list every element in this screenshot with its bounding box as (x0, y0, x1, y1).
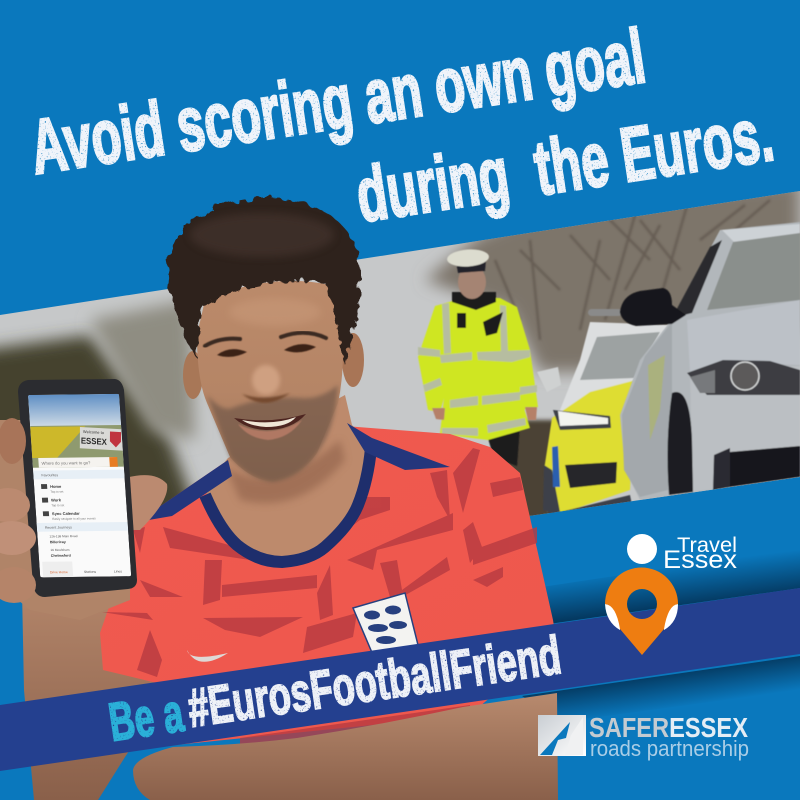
collar (205, 448, 371, 562)
crossed arm (133, 693, 558, 800)
roads partnership: roads partnership (590, 736, 749, 761)
work sub: Tap to set (51, 503, 65, 507)
favourites label: Favourites (41, 473, 59, 477)
windscreen (580, 332, 660, 380)
right eye (284, 344, 316, 352)
title: Avoid scoring an own goal during the Euros (25, 13, 779, 239)
sign text: Welcome to (83, 429, 105, 435)
hi-vis coat (418, 298, 538, 440)
sky (0, 191, 800, 516)
trees right (425, 180, 800, 372)
tab label lines: Lines (114, 570, 122, 574)
police car (537, 309, 670, 515)
favourites header (33, 470, 125, 479)
logo square (538, 715, 586, 756)
lower lip (238, 420, 302, 440)
mirror (537, 367, 561, 392)
logo: Safer Essex roads partnership (538, 712, 749, 761)
screen background (28, 394, 131, 577)
hood (687, 300, 800, 372)
swoosh (187, 650, 228, 662)
reflective strips (418, 303, 537, 436)
forearm below phone (22, 560, 170, 800)
nose base shadow (242, 393, 290, 403)
sign crest (110, 432, 121, 448)
face (197, 281, 343, 482)
field (30, 425, 124, 468)
grille (730, 446, 800, 487)
windscreen (707, 233, 800, 310)
front bumper (690, 366, 800, 492)
hair highlight (190, 213, 334, 257)
sign board (80, 427, 124, 451)
hat band (456, 260, 486, 273)
finger two (0, 488, 30, 522)
photo band: roadside scene (0, 191, 800, 516)
logo: Travel Essex (605, 534, 738, 655)
tab label drive: Drive Home (50, 570, 68, 574)
collar and body camera (452, 292, 503, 336)
orange pin (605, 568, 678, 655)
search text: Where do you want to go? (41, 460, 91, 466)
phone (18, 379, 137, 597)
road mark (540, 722, 570, 755)
neck (205, 395, 372, 562)
trousers (488, 431, 520, 466)
palm behind phone (0, 420, 130, 620)
door reflection (622, 322, 672, 497)
presenter: man in England shirt (22, 198, 556, 800)
hands (432, 407, 537, 420)
Essex sign (80, 427, 124, 451)
trees left pale (90, 300, 195, 440)
left eye (217, 349, 247, 357)
hashtag: #EurosFootballFriend (184, 625, 565, 739)
tree trunks (495, 195, 770, 340)
fingers on phone edge (0, 418, 36, 603)
road mark right (565, 717, 583, 755)
sky photo (28, 394, 121, 427)
finger four (0, 567, 36, 603)
door and body side (620, 222, 800, 500)
SAFER ESSEX wordmark: SAFERESSEX (589, 712, 748, 743)
hand holding phone (0, 420, 167, 620)
Be a: Be a (105, 683, 188, 753)
hedge behind car (505, 420, 555, 520)
wing mirror (620, 288, 686, 326)
nose highlight (252, 365, 280, 395)
crest (353, 593, 418, 655)
shoulder trim (137, 423, 450, 522)
ear right (342, 333, 364, 387)
calendar row: Sync Calendar (52, 511, 80, 516)
work row: Work (51, 497, 62, 502)
spoiler (588, 309, 622, 316)
eyebrows (205, 333, 326, 346)
journey two place: Chelmsford (51, 554, 71, 558)
banner text: Be a #EurosFootballFriend (105, 625, 565, 753)
neck shadow (225, 440, 345, 503)
journey two: 16 Moulsham (50, 548, 70, 552)
blue stripe (552, 446, 560, 487)
tab drive home (42, 561, 73, 577)
trees left (0, 324, 199, 506)
sign ESSEX: ESSEX (81, 436, 107, 447)
shirt (100, 426, 556, 745)
shirt pattern (102, 448, 537, 748)
forehead highlight (229, 298, 321, 326)
shadow above banner (535, 548, 800, 626)
search bar (38, 457, 117, 468)
recent header (37, 522, 128, 532)
tab label stations: Stations (84, 570, 97, 574)
ear left (183, 351, 203, 399)
index finger (0, 418, 26, 464)
home sub: Tap to set (50, 490, 64, 494)
lower dark sill (543, 465, 632, 515)
police officer (418, 248, 538, 466)
home row: Home (50, 484, 62, 489)
wheel (668, 392, 693, 495)
row icons (41, 484, 49, 516)
finger three (0, 521, 36, 555)
calendar sub: Easily navigate to all your events (52, 516, 96, 521)
Essex: Essex (663, 546, 738, 574)
teeth (242, 417, 296, 427)
headlight (687, 360, 800, 395)
side crescents (605, 604, 678, 630)
hat (446, 248, 490, 268)
search button (109, 457, 118, 467)
roof strip (722, 224, 800, 242)
journey one: 126-138 Main Road (49, 534, 78, 538)
phone screen (28, 394, 134, 577)
headlight (553, 410, 611, 430)
person head (627, 534, 657, 564)
hair (168, 198, 360, 365)
hashtag banner (0, 588, 800, 771)
phone case (18, 379, 137, 597)
lions (364, 606, 407, 644)
head (458, 270, 486, 300)
side window (676, 240, 722, 315)
shadow below banner (522, 656, 800, 722)
Travel: Travel (677, 534, 737, 557)
grille (565, 462, 617, 488)
recent label: Recent Journeys (45, 525, 72, 530)
roof and pillars (560, 321, 668, 411)
journey one place: Billericay (50, 540, 66, 544)
stubble (207, 385, 338, 482)
thumb (125, 475, 167, 530)
mouth smile (234, 414, 306, 430)
body yellow (544, 380, 636, 512)
badge (353, 593, 418, 655)
silver car (620, 222, 800, 500)
